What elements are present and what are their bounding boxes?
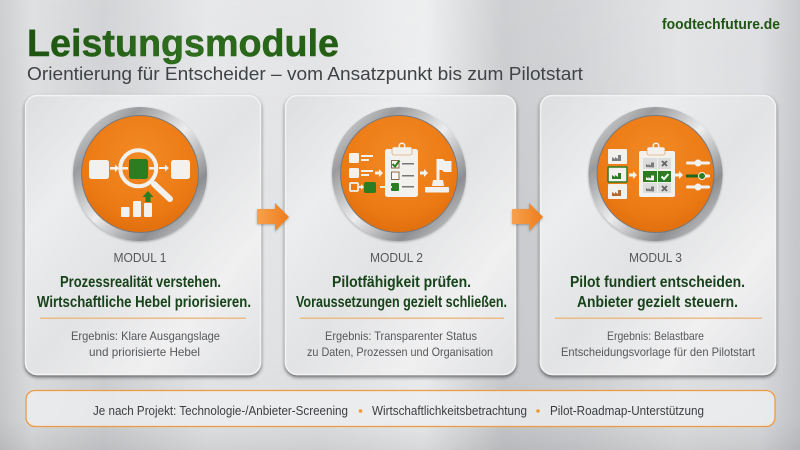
module label: MODUL 3 [629, 251, 682, 265]
subtitle: Orientierung für Entscheider – vom Ansatzpunkt bis zum Pilotstart [27, 64, 583, 84]
divider [555, 318, 762, 319]
module heading [296, 274, 507, 311]
note text: Je nach Projekt: Technologie-/Anbieter-Screening [93, 403, 348, 418]
result text [307, 329, 493, 359]
result text [71, 329, 220, 359]
note text: Wirtschaftlichkeitsbetrachtung [372, 403, 527, 418]
arrow: Modul 2 to Modul 3 [512, 203, 543, 231]
module heading [570, 274, 745, 311]
title: Leistungsmodule [27, 23, 339, 65]
result text: zu Daten, Prozessen und Organisation [307, 345, 493, 359]
result text: und priorisierte Hebel [89, 345, 200, 359]
card 3 background [540, 96, 776, 374]
separator dots [359, 409, 540, 413]
module label: MODUL 2 [370, 251, 423, 265]
icon: pilot readiness medallion [332, 107, 466, 241]
note text: Pilot-Roadmap-Unterstützung [550, 403, 704, 418]
result text: Ergebnis: Transparenter Status [325, 329, 477, 343]
module heading: Pilot fundiert entscheiden. [570, 274, 745, 291]
result text [561, 329, 756, 359]
module heading [37, 274, 251, 311]
divider [40, 318, 246, 319]
panel: Modul 1 [26, 96, 260, 374]
bottom note bar [26, 390, 775, 426]
module heading: Voraussetzungen gezielt schließen. [296, 294, 507, 311]
arrow: Modul 1 to Modul 2 [257, 203, 289, 231]
card 2 background [286, 96, 516, 374]
result text: Ergebnis: Klare Ausgangslage [71, 329, 220, 343]
result text: Entscheidungsvorlage für den Pilotstart [561, 345, 756, 359]
module heading: Wirtschaftliche Hebel priorisieren. [37, 294, 251, 311]
note text [93, 403, 704, 418]
panel: Modul 3 [540, 96, 776, 374]
brand url: foodtechfuture.de [662, 17, 780, 33]
icon: decision medallion [588, 107, 722, 241]
result text: Ergebnis: Belastbare [607, 329, 704, 343]
panel: Modul 2 [286, 96, 516, 374]
module heading: Anbieter gezielt steuern. [577, 294, 738, 311]
icon: process analysis medallion [73, 107, 207, 241]
divider [300, 318, 504, 319]
module label: MODUL 1 [114, 251, 167, 265]
card 1 background [26, 96, 260, 374]
module heading: Prozessrealität verstehen. [60, 274, 221, 291]
module heading: Pilotfähigkeit prüfen. [332, 274, 471, 291]
